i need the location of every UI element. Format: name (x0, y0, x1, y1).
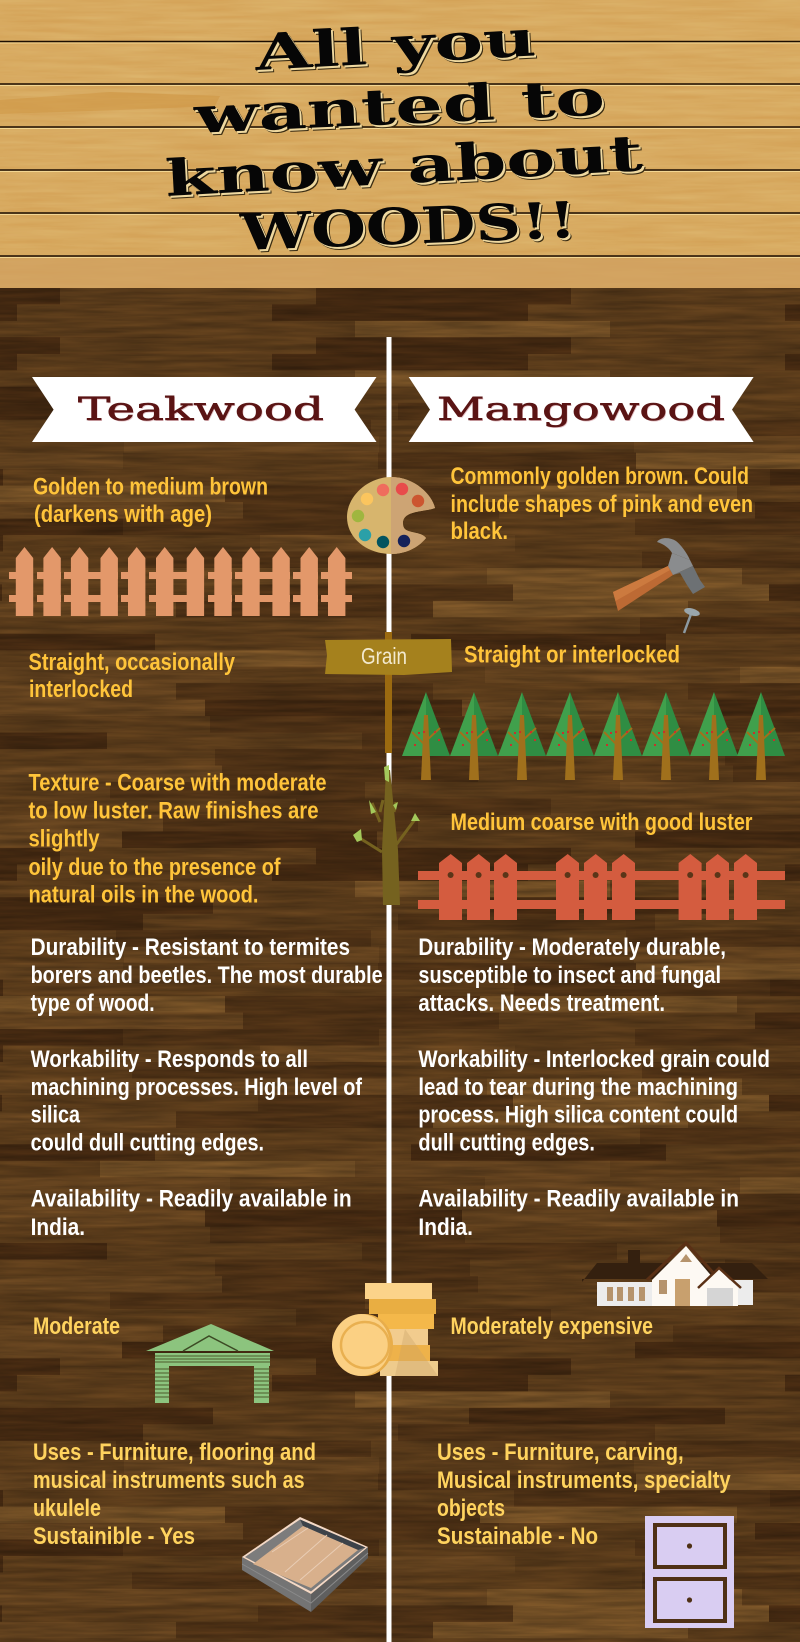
icon: bare sapling (353, 765, 420, 905)
title: wanted to (191, 67, 606, 145)
properties text: mangowood: dull cutting edges. (418, 1130, 595, 1156)
icon: red fence (418, 854, 785, 920)
title (163, 8, 644, 262)
uses text: teakwood: musical instruments such as (33, 1467, 305, 1494)
title: know about (163, 123, 644, 208)
properties text: mangowood: India. (418, 1214, 473, 1241)
uses text: mangowood (437, 1439, 731, 1550)
colour text: teakwood (33, 474, 268, 528)
grain text: teakwood (28, 649, 236, 703)
title: All you (252, 8, 537, 82)
properties text: mangowood: lead to tear during the machining (418, 1074, 738, 1101)
properties text: mangowood (418, 934, 770, 1241)
grain text: mangowood: Straight or interlocked (464, 642, 680, 668)
properties text: teakwood: Availability - Readily available in (31, 1186, 352, 1212)
uses text: teakwood (33, 1439, 316, 1550)
icon: lavender drawers (645, 1516, 734, 1628)
uses text: mangowood: Uses - Furniture, carving, (437, 1439, 684, 1466)
icon: house (582, 1243, 768, 1306)
properties text: teakwood: type of wood. (31, 990, 155, 1017)
uses text: mangowood: Sustainable - No (437, 1523, 598, 1550)
banner: Teakwood (32, 377, 376, 442)
icon: wooden tray (242, 1517, 368, 1612)
banner: Teakwood: Teakwood (79, 391, 325, 429)
properties text: teakwood: silica (31, 1102, 81, 1128)
properties text: teakwood: machining processes. High level of (31, 1074, 363, 1101)
banner: Mangowood (409, 377, 754, 442)
properties text: teakwood: borers and beetles. The most durable (31, 962, 383, 989)
cost text: mangowood: Moderately expensive (450, 1313, 653, 1340)
texture text: teakwood (28, 770, 326, 908)
header: light wood plank panel (0, 0, 800, 288)
sign: Grain (325, 639, 452, 675)
cost text: teakwood: Moderate (33, 1313, 120, 1340)
properties text: mangowood: Durability - Moderately durable, (418, 934, 726, 961)
properties text: teakwood: Workability - Responds to all (31, 1046, 308, 1073)
post under the Grain sign (385, 632, 392, 753)
title: WOODS!! (238, 190, 577, 262)
texture text: teakwood: Texture - Coarse with moderate (28, 770, 326, 796)
center divider line (386, 337, 392, 1642)
icon: paint palette (347, 477, 435, 554)
colour text: teakwood: Golden to medium brown (33, 474, 268, 500)
properties text: teakwood (31, 934, 383, 1241)
banner: Mangowood: Mangowood (437, 390, 725, 428)
banner: Mangowood: Mangowood (438, 391, 726, 429)
icon: green shelter (146, 1324, 274, 1403)
properties text: mangowood: Availability - Readily available in (418, 1186, 739, 1212)
properties text: teakwood: Durability - Resistant to termites (31, 934, 350, 961)
uses text: teakwood: Uses - Furniture, flooring and (33, 1439, 316, 1466)
properties text: teakwood: could dull cutting edges. (31, 1130, 264, 1156)
colour text: mangowood (450, 463, 753, 545)
icon: hammer and nail (613, 538, 705, 633)
texture text: teakwood: slightly (28, 826, 100, 852)
properties text: mangowood: attacks. Needs treatment. (418, 990, 665, 1017)
colour text: mangowood: black. (450, 518, 508, 545)
properties text: teakwood: India. (31, 1214, 85, 1241)
uses text: teakwood: ukulele (33, 1495, 101, 1522)
banner: Teakwood: Teakwood (78, 390, 324, 428)
properties text: mangowood: susceptible to insect and fungal (418, 962, 721, 989)
texture text: teakwood: natural oils in the wood. (28, 882, 258, 908)
colour text: teakwood: (darkens with age) (34, 501, 212, 528)
grain text: teakwood: interlocked (29, 676, 133, 703)
texture text: teakwood: oily due to the presence of (28, 854, 281, 881)
properties text: mangowood: process. High silica content could (418, 1102, 738, 1128)
grain text: teakwood: Straight, occasionally (28, 649, 236, 676)
texture text: teakwood: to low luster. Raw finishes are (28, 798, 318, 824)
uses text: mangowood: objects (437, 1495, 505, 1522)
sign: Grain: Grain (361, 643, 407, 669)
uses text: teakwood: Sustainible - Yes (33, 1523, 195, 1550)
icon: row of trees (402, 692, 785, 780)
icon: stack of coins (332, 1283, 438, 1376)
uses text: mangowood: Musical instruments, specialty (437, 1467, 731, 1494)
icon: peach picket fence (9, 547, 352, 616)
